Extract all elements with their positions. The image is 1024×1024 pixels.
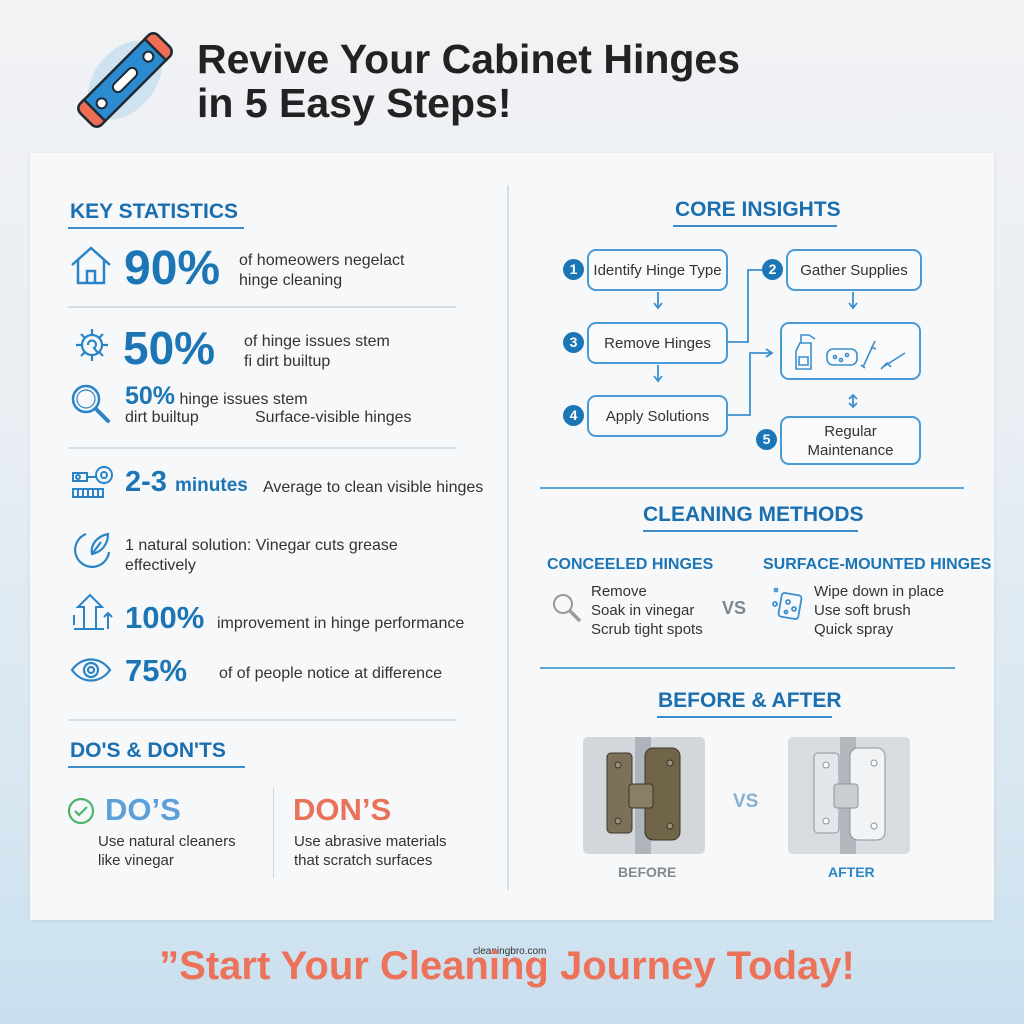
icon: magnifier gray: [553, 594, 582, 622]
title: Revive Your Cabinet Hinges: [197, 36, 740, 82]
text: of hinge issues stem: [244, 333, 390, 350]
surface-mounted hinges: Wipe down in place: [814, 583, 944, 600]
supplies box: [780, 322, 921, 380]
icon: tools: [72, 466, 113, 498]
step 5: Maintenance: [808, 442, 893, 458]
stat: 75%: 75%: [125, 653, 187, 688]
flowchart: 1: [570, 261, 577, 277]
flowchart: 4: [570, 407, 577, 423]
text: of of people notice at difference: [219, 665, 442, 682]
stat: 50% small: 50% hinge issues stem: [125, 382, 308, 410]
step 4: [587, 395, 728, 437]
conceeled hinges: [547, 556, 713, 638]
stat: 2-3 minutes: 2-3 minutes: [125, 466, 248, 498]
heading: key statistics: KEY STATISTICS: [70, 200, 238, 223]
conceeled hinges: Remove: [591, 583, 647, 600]
text: of homeowers negelact: [239, 252, 404, 269]
stat: 100%: 100%: [125, 600, 204, 635]
don'ts block: Use abrasive materials: [294, 833, 447, 850]
flowchart: [563, 249, 922, 465]
heading: core insights: CORE INSIGHTS: [675, 198, 841, 221]
icon: magnifier: [72, 384, 110, 424]
conceeled hinges: Scrub tight spots: [591, 621, 703, 638]
heading: cleaning methods: CLEANING METHODS: [643, 503, 864, 526]
flowchart: 5: [763, 431, 770, 447]
step 1: [587, 249, 728, 291]
icon: house: [71, 246, 111, 284]
icon: leaf: [74, 532, 110, 568]
after image: [788, 737, 910, 854]
don'ts block: DON’S: [293, 792, 391, 827]
don'ts block: [293, 792, 447, 869]
stat: 50%: 50%: [123, 322, 215, 374]
watermark: cleaningbro.com: [473, 946, 546, 957]
title: in 5 Easy Steps!: [197, 80, 511, 126]
surface-mounted hinges: SURFACE-MOUNTED HINGES: [763, 556, 991, 573]
flowchart: 3: [570, 334, 577, 350]
text: hinge cleaning: [239, 272, 342, 289]
step 4: Apply Solutions: [606, 408, 709, 424]
stat: natural solution: effectively: [125, 557, 196, 574]
do's block: DO’S: [105, 792, 181, 827]
footer call to action: ”Start Your Cleaning Journey Today!: [159, 944, 855, 988]
surface-mounted hinges: Use soft brush: [814, 602, 911, 619]
do's block: Use natural cleaners: [98, 833, 236, 850]
step 2: Gather Supplies: [800, 262, 908, 278]
text: Surface-visible hinges: [255, 409, 412, 426]
vs: VS: [722, 598, 746, 618]
stat: 90%: 90%: [124, 242, 220, 295]
surface-mounted hinges: Quick spray: [814, 621, 893, 638]
heading: before & after: BEFORE & AFTER: [658, 689, 842, 712]
flowchart: 2: [769, 261, 776, 277]
do's block: [68, 792, 236, 869]
stat: natural solution: 1 natural solution: Vinegar cuts grease: [125, 537, 398, 554]
icon: eye: [70, 658, 112, 682]
title: [197, 36, 740, 126]
icon: check: [68, 798, 94, 824]
don'ts block: that scratch surfaces: [294, 852, 432, 869]
step 3: [587, 322, 728, 364]
text: BEFORE: [618, 864, 676, 880]
icon: hinge logo: [77, 32, 173, 128]
text: Average to clean visible hinges: [263, 479, 483, 496]
conceeled hinges: CONCEELED HINGES: [547, 556, 713, 573]
before image: [583, 737, 705, 854]
do's block: like vinegar: [98, 852, 174, 869]
surface-mounted hinges: [763, 556, 991, 638]
icon: gear: [76, 329, 108, 361]
icon: arrow up: [73, 594, 113, 630]
text: improvement in hinge performance: [217, 615, 464, 632]
text: AFTER: [828, 864, 875, 880]
stat: natural solution: [125, 537, 398, 574]
text: VS: [733, 791, 758, 812]
text: fi dirt builtup: [244, 353, 330, 370]
step 5: [780, 416, 921, 465]
icon: sponge: [772, 588, 802, 620]
conceeled hinges: Soak in vinegar: [591, 602, 694, 619]
text: dirt builtup: [125, 409, 199, 426]
step 2: [786, 249, 922, 291]
step 3: Remove Hinges: [604, 334, 711, 352]
step 1: Identify Hinge Type: [593, 262, 722, 278]
heading: dos and donts: DO'S & DON'TS: [70, 739, 226, 762]
step 5: Regular: [824, 422, 877, 440]
panel: main content: [30, 153, 994, 920]
